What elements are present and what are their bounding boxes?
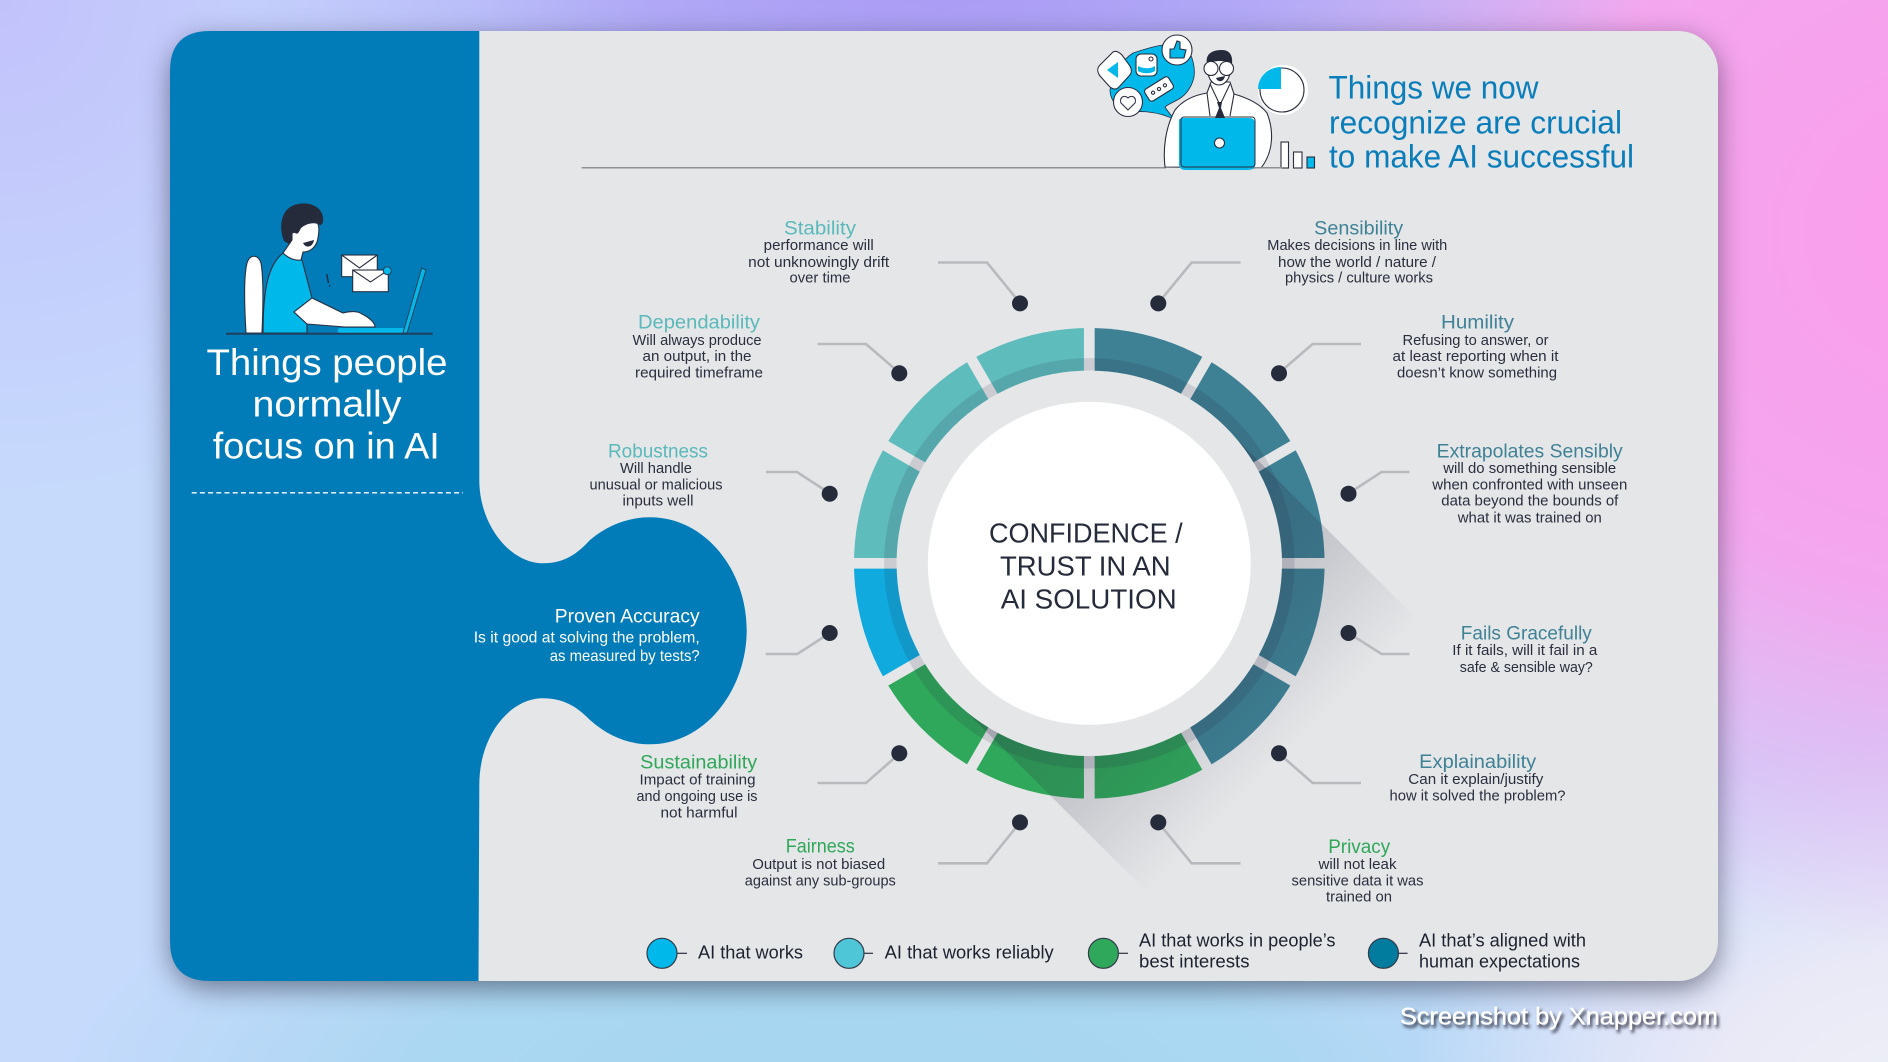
text block: proven accuracy bbox=[474, 606, 700, 665]
label: sensibility: physics / culture works bbox=[1285, 270, 1433, 287]
leader line: humility bbox=[1271, 344, 1361, 381]
label: fails gracefully: safe & sensible way? bbox=[1460, 659, 1593, 676]
label: privacy: sensitive data it was bbox=[1292, 873, 1424, 890]
center title: confidence / trust in an AI solution bbox=[989, 517, 1183, 615]
title: things people normally focus on in AI: Things people bbox=[206, 342, 448, 383]
label: sustainability: not harmful bbox=[660, 805, 738, 822]
label: privacy: trained on bbox=[1326, 889, 1392, 906]
label: explainability: Explainability bbox=[1419, 752, 1537, 773]
label: fails gracefully bbox=[1452, 623, 1598, 676]
panel: left blue panel with proven accuracy lobe bbox=[170, 31, 747, 981]
label: fairness: against any sub-groups bbox=[745, 873, 896, 890]
label: humility: doesn’t know something bbox=[1397, 364, 1557, 381]
leader line: robustness bbox=[766, 472, 838, 502]
label: explainability: how it solved the problem? bbox=[1390, 788, 1566, 805]
legend item: AI that's aligned with human expectations: AI that’s aligned with bbox=[1419, 931, 1586, 951]
label: robustness bbox=[590, 441, 722, 510]
label: dependability bbox=[632, 312, 763, 381]
label: humility: Humility bbox=[1441, 312, 1515, 333]
label: robustness: Will handle bbox=[620, 460, 692, 477]
leader line: extrapolates sensibly bbox=[1340, 472, 1410, 502]
label: stability: Stability bbox=[784, 218, 857, 239]
legend item: AI that's aligned with human expectations: human expectations bbox=[1419, 952, 1580, 972]
legend item: AI that works bbox=[647, 938, 803, 968]
leader line: fairness bbox=[938, 814, 1028, 863]
label: sensibility: Sensibility bbox=[1314, 218, 1404, 239]
label: stability: over time bbox=[790, 270, 850, 287]
leader line: stability bbox=[938, 262, 1028, 311]
label: robustness: Robustness bbox=[608, 441, 708, 462]
divider line under header bbox=[582, 167, 1166, 169]
label: humility bbox=[1392, 312, 1559, 381]
label: privacy: Privacy bbox=[1328, 837, 1391, 858]
leader line: sensibility bbox=[1150, 262, 1241, 311]
label: extrapolates sensibly: will do something sensible bbox=[1442, 460, 1616, 477]
label: fairness bbox=[745, 837, 896, 890]
leader line: fails gracefully bbox=[1340, 625, 1410, 654]
leader line: explainability bbox=[1271, 745, 1361, 783]
label: fails gracefully: Fails Gracefully bbox=[1461, 623, 1592, 644]
title: things people normally focus on in AI: focus on in AI bbox=[213, 425, 440, 466]
label: extrapolates sensibly: Extrapolates Sensibly bbox=[1437, 441, 1623, 462]
label: extrapolates sensibly bbox=[1431, 441, 1627, 526]
text block: proven accuracy: Proven Accuracy bbox=[555, 606, 700, 628]
legend item: AI that works in people's best interests: AI that works in people’s bbox=[1139, 931, 1336, 951]
card background bbox=[170, 31, 1718, 981]
legend item: AI that works reliably bbox=[834, 938, 1054, 968]
heading: things we now recognize are crucial: Things we now bbox=[1328, 70, 1539, 106]
leader line: proven accuracy bbox=[766, 625, 838, 654]
icon: man with laptop, speech bubble and charts bbox=[1098, 35, 1314, 170]
label: fails gracefully: If it fails, will it fail in a bbox=[1452, 642, 1598, 659]
label: humility: at least reporting when it bbox=[1392, 348, 1559, 365]
center title: confidence / trust in an AI solution: TRUST IN AN bbox=[1000, 550, 1171, 581]
label: sensibility bbox=[1267, 218, 1447, 287]
legend item: AI that's aligned with human expectations bbox=[1368, 931, 1586, 972]
label: extrapolates sensibly: what it was trained on bbox=[1457, 510, 1602, 526]
legend item: AI that works reliably: AI that works reliably bbox=[885, 942, 1054, 962]
center title: confidence / trust in an AI solution: AI SOLUTION bbox=[1001, 584, 1177, 615]
label: humility: Refusing to answer, or bbox=[1402, 332, 1549, 349]
heading: things we now recognize are crucial bbox=[1328, 70, 1634, 175]
label: stability: not unknowingly drift bbox=[748, 254, 890, 271]
label: dependability: required timeframe bbox=[635, 364, 763, 381]
label: stability: performance will bbox=[764, 237, 874, 254]
label: sensibility: how the world / nature / bbox=[1278, 254, 1437, 271]
legend item: AI that works in people's best interests bbox=[1088, 931, 1336, 972]
label: sustainability bbox=[636, 752, 758, 822]
label: sensibility: Makes decisions in line with bbox=[1267, 237, 1447, 254]
label: privacy bbox=[1292, 837, 1424, 906]
leader line: sustainability bbox=[818, 745, 907, 783]
legend item: AI that works: AI that works bbox=[698, 942, 803, 962]
label: sustainability: and ongoing use is bbox=[636, 788, 758, 805]
label: sustainability: Sustainability bbox=[640, 752, 758, 773]
label: explainability: Can it explain/justify bbox=[1408, 771, 1544, 788]
text block: proven accuracy: Is it good at solving the problem, bbox=[474, 629, 700, 646]
legend item: AI that works in people's best interests: best interests bbox=[1139, 952, 1250, 972]
label: extrapolates sensibly: data beyond the bounds of bbox=[1441, 493, 1619, 510]
label: explainability bbox=[1390, 752, 1566, 805]
label: fairness: Output is not biased bbox=[752, 856, 885, 873]
label: robustness: unusual or malicious bbox=[590, 477, 722, 494]
label: dependability: an output, in the bbox=[642, 348, 752, 365]
icon: person typing at a laptop bbox=[226, 203, 433, 334]
label: privacy: will not leak bbox=[1317, 856, 1397, 873]
label: stability bbox=[748, 218, 890, 287]
label: dependability: Will always produce bbox=[632, 332, 762, 349]
label: sustainability: Impact of training bbox=[640, 771, 756, 788]
label: extrapolates sensibly: when confronted with unseen bbox=[1431, 477, 1627, 494]
chart: segmented ring bbox=[854, 328, 1421, 895]
label: robustness: inputs well bbox=[622, 493, 694, 510]
heading: things we now recognize are crucial: recognize are crucial bbox=[1329, 104, 1622, 140]
title: things people normally focus on in AI bbox=[206, 342, 448, 466]
legend bbox=[647, 931, 1586, 972]
label: fairness: Fairness bbox=[786, 837, 855, 858]
watermark: screenshot by xnapper: Screenshot by Xnapper.com bbox=[1400, 1003, 1718, 1030]
heading: things we now recognize are crucial: to make AI successful bbox=[1329, 139, 1634, 175]
center title: confidence / trust in an AI solution: CONFIDENCE / bbox=[989, 517, 1183, 548]
label: dependability: Dependability bbox=[638, 312, 761, 333]
text block: proven accuracy: as measured by tests? bbox=[550, 648, 700, 665]
leader line: dependability bbox=[818, 344, 907, 381]
leader line: privacy bbox=[1150, 814, 1241, 863]
title: things people normally focus on in AI: normally bbox=[252, 384, 402, 425]
